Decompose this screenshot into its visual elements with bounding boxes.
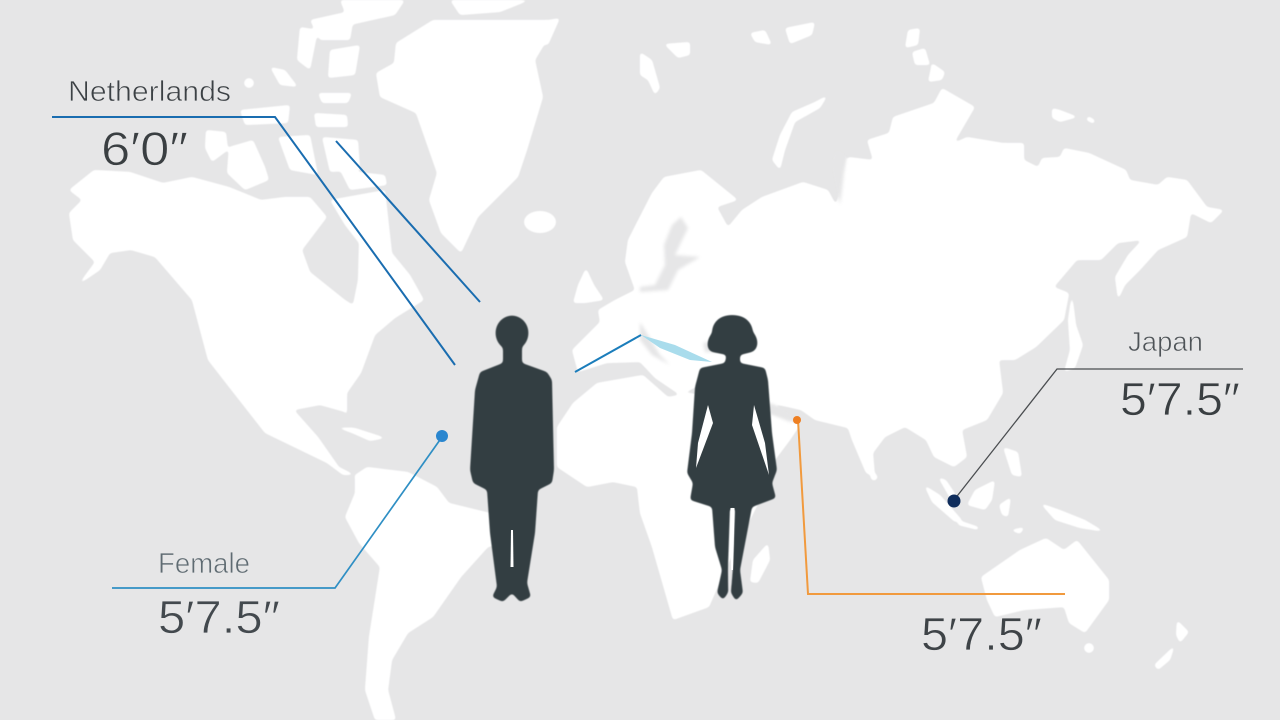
UK — [573, 268, 604, 303]
callout: orange leader line — [798, 420, 1065, 594]
Australia — [981, 538, 1109, 633]
Southeast Asia islands — [924, 447, 1105, 534]
callout: Japan label: Japan — [1128, 326, 1203, 357]
callout: Japan leader line — [954, 369, 1243, 500]
New Zealand — [1154, 620, 1189, 670]
silhouette: woman — [687, 315, 777, 601]
callout: orange height: 5′7.5″ — [921, 608, 1042, 660]
Kamchatka — [1115, 240, 1158, 300]
callout: Female label: Female — [158, 548, 250, 580]
callout: Netherlands leader lines — [52, 117, 480, 365]
Tasmania — [1084, 643, 1094, 653]
silhouette: man — [470, 316, 554, 602]
callout: Female marker — [436, 430, 448, 442]
South America — [345, 467, 520, 720]
Japan and Sakhalin — [1064, 293, 1083, 372]
callout: Netherlands height: 6′0″ — [101, 122, 188, 175]
Greenland — [376, 20, 559, 253]
Eurasia — [572, 88, 1224, 477]
callout: orange marker — [793, 416, 801, 424]
connector: centre wedge — [641, 335, 712, 362]
Cuba — [335, 427, 386, 441]
seas — [640, 150, 846, 422]
Africa — [557, 375, 800, 620]
callout: Female height: 5′7.5″ — [158, 591, 280, 643]
callout: Netherlands label: Netherlands — [68, 76, 231, 108]
Sri Lanka — [870, 474, 878, 480]
Iceland — [524, 211, 556, 233]
Arctic islands — [205, 0, 560, 253]
callout: Female leader line — [112, 437, 442, 588]
callout: Japan height: 5′7.5″ — [1120, 373, 1240, 425]
North America — [69, 170, 424, 475]
Russian Arctic islands — [640, 22, 1095, 170]
Madagascar — [750, 543, 770, 583]
callout: Japan marker — [948, 494, 960, 508]
connector: centre blue line — [575, 335, 641, 372]
